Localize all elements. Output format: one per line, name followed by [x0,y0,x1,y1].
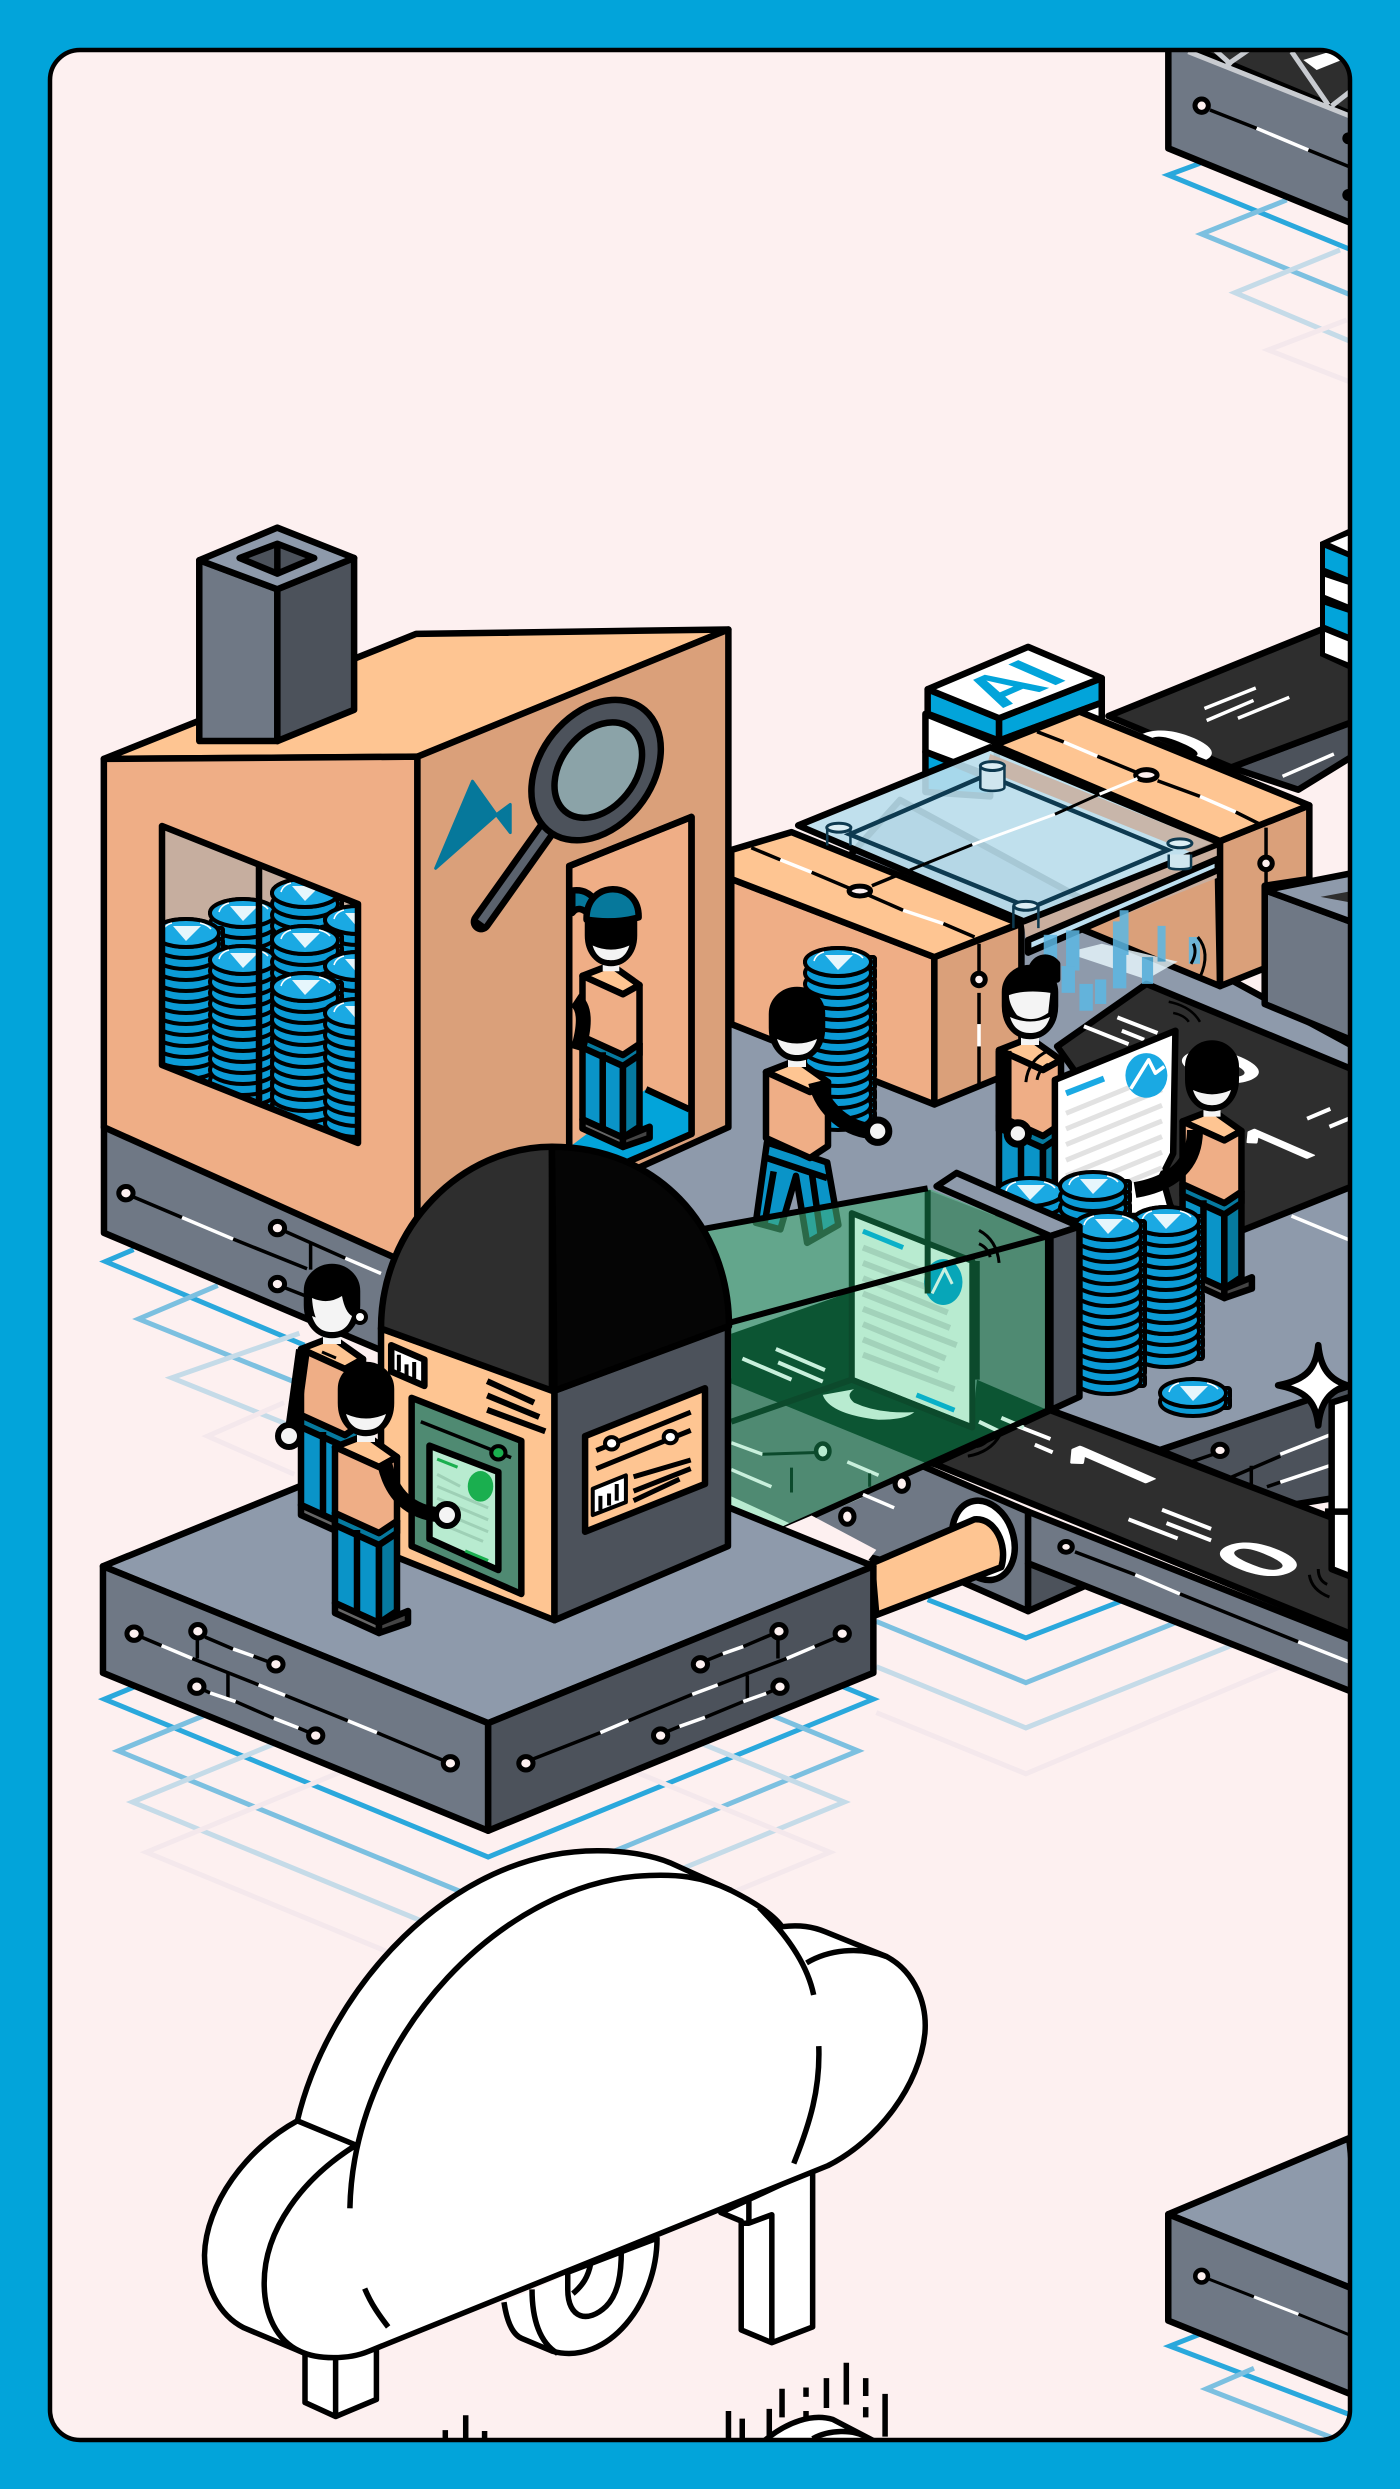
dark tinted road [731,1292,1048,1464]
cloud [204,1851,925,2358]
number 1 on road: 1 [1218,1118,1347,1174]
wave marks on box [1191,937,1205,977]
shadow grids: factory [106,1250,304,1474]
number 0 on front road: 0 [1169,1520,1336,1593]
road with number 1 [1057,984,1356,1247]
glass table [798,747,1220,953]
dots under tunnel [785,1476,908,1561]
large coin stacks [1075,1207,1203,1394]
kiosk control sign [585,1388,705,1532]
window frame [162,826,358,1143]
bottom data ticks [445,2363,885,2441]
glass light back wall [696,1188,1048,1533]
hat [572,889,639,921]
chimney [199,528,354,741]
middle platform left wall [731,1386,1086,1614]
shadow grids: middle platform [876,1600,1280,1774]
icon: chart sticker [391,1345,424,1386]
worker touching screen [335,1365,458,1633]
document held up [1055,1031,1175,1216]
factory window wall [165,831,350,920]
green glass tunnel [696,1188,1048,1533]
back right road [1108,629,1356,790]
right storage box [995,712,1309,986]
dome kiosk [381,1147,729,1620]
small coin piles [997,1172,1130,1228]
text lines on kiosk [487,1381,545,1431]
coin stack beside worker [805,948,875,1130]
lower wall tint [731,1383,928,1533]
person in doorway [572,889,650,1147]
orange pipe [872,1496,1023,1615]
circuit lines right [533,1635,835,1759]
shadow grids: top right [1168,163,1353,383]
worker holding document [1135,1044,1252,1298]
kiosk screen [412,1398,521,1594]
front platform [103,1410,873,1831]
road with numbers 1 and 0 [934,1410,1356,1693]
loose coin [1160,1379,1230,1416]
bottom right platform [1168,2138,1365,2400]
cloud legs [305,2170,813,2417]
number 0 on road: 0 [1131,1027,1298,1100]
right grey block [1265,872,1356,1042]
coin stacks in window [165,879,355,1138]
factory base [104,1127,417,1355]
door [569,817,692,1187]
logo mark on factory [436,781,510,868]
number 1 on front road: 1 [1035,1432,1195,1502]
shadow grids: bottom right [1163,2334,1348,2438]
top right platform [1168,47,1354,224]
number 0 on back road: 0 [1084,708,1251,781]
magnifying glass [470,696,664,932]
glass end cap [937,1173,1079,1410]
glass darker right wall [928,1190,1048,1410]
right wall under floor [1166,1390,1348,1506]
middle platform floor [646,796,1348,1468]
left storage box [731,832,1021,1104]
AI block stack [925,647,1102,796]
document in glass [852,1213,972,1427]
factory body [104,629,728,1268]
worker with spread legs [756,990,889,1243]
white column and sparkle [1278,1345,1356,1579]
hologram chart [1044,910,1200,1011]
AI label: AI [939,652,1085,715]
shadow grids: front platform [98,1686,880,1953]
circuit lines left [141,1637,443,1760]
striped block top right [1320,529,1348,669]
worker behind [278,1267,374,1535]
worker with hologram [996,954,1064,1187]
